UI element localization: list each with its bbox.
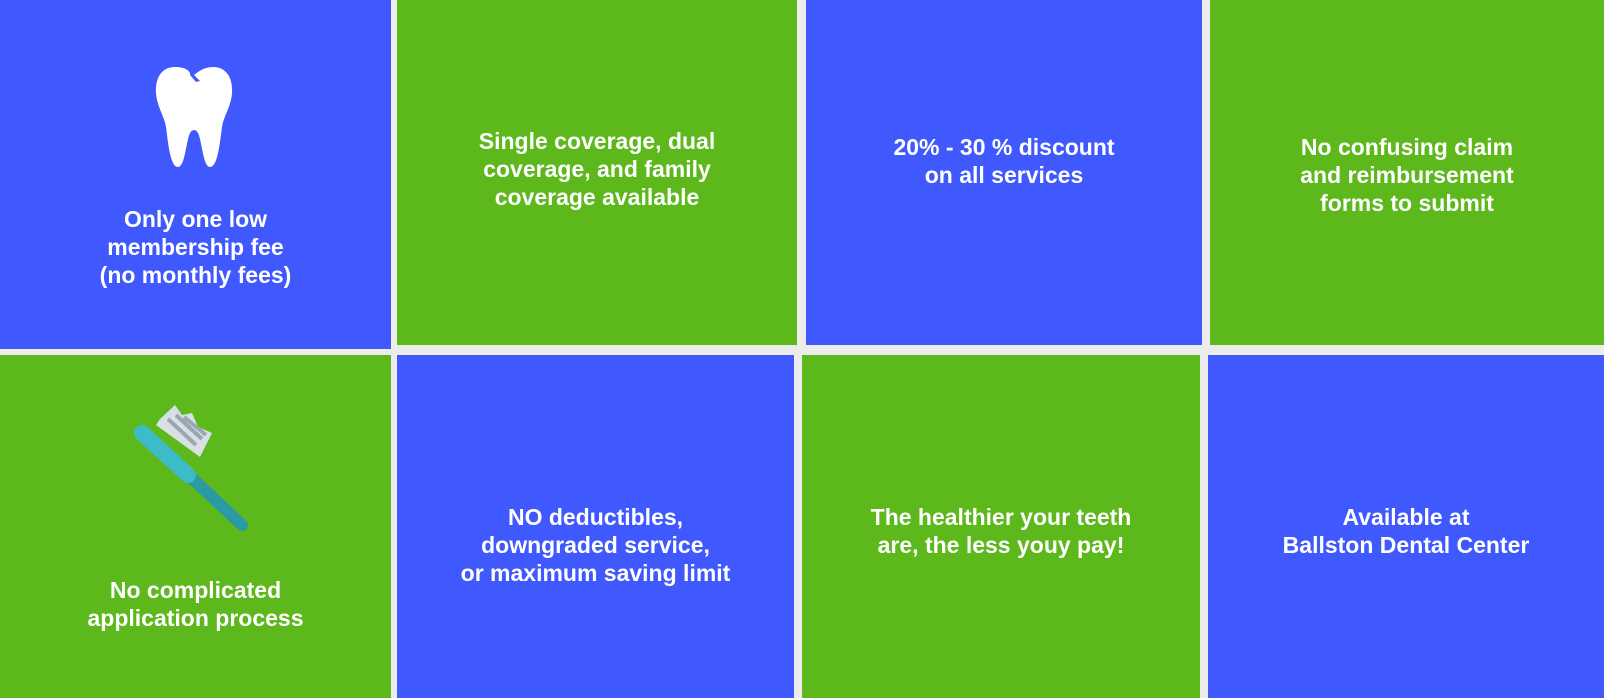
text: on all services bbox=[925, 162, 1083, 188]
tile: application bbox=[0, 355, 391, 698]
text bbox=[893, 134, 1115, 188]
text: No confusing claim bbox=[1301, 134, 1513, 160]
icon: toothbrush bbox=[134, 405, 248, 531]
tile: discount bbox=[806, 0, 1202, 345]
text: are, the less youy pay! bbox=[878, 532, 1124, 558]
text bbox=[87, 577, 304, 631]
text bbox=[1300, 134, 1514, 216]
text: No complicated bbox=[110, 577, 281, 603]
icon: tooth bbox=[156, 67, 232, 167]
text: downgraded service, bbox=[481, 532, 710, 558]
text: NO deductibles, bbox=[508, 504, 683, 530]
text: Only one low bbox=[124, 206, 267, 232]
text: (no monthly fees) bbox=[100, 262, 291, 288]
text: Single coverage, dual bbox=[479, 128, 715, 154]
tile: healthier teeth bbox=[802, 355, 1200, 698]
tile: location bbox=[1208, 355, 1604, 698]
text: Available at bbox=[1342, 504, 1469, 530]
text: 20% - 30 % discount bbox=[893, 134, 1115, 160]
tile: membership fee bbox=[0, 0, 391, 349]
text: coverage, and family bbox=[483, 156, 711, 182]
tile: no deductibles bbox=[397, 355, 794, 698]
text: Ballston Dental Center bbox=[1283, 532, 1529, 558]
text: membership fee bbox=[107, 234, 284, 260]
text bbox=[100, 206, 291, 288]
text bbox=[870, 504, 1131, 558]
text: The healthier your teeth bbox=[871, 504, 1131, 530]
tile: no claim forms bbox=[1210, 0, 1604, 345]
text bbox=[461, 504, 730, 586]
text: coverage available bbox=[495, 184, 699, 210]
text bbox=[1283, 504, 1529, 558]
text: application process bbox=[87, 605, 304, 631]
text bbox=[479, 128, 715, 210]
text: forms to submit bbox=[1320, 190, 1494, 216]
text: or maximum saving limit bbox=[461, 560, 730, 586]
text: and reimbursement bbox=[1300, 162, 1514, 188]
tile: coverage bbox=[397, 0, 797, 345]
